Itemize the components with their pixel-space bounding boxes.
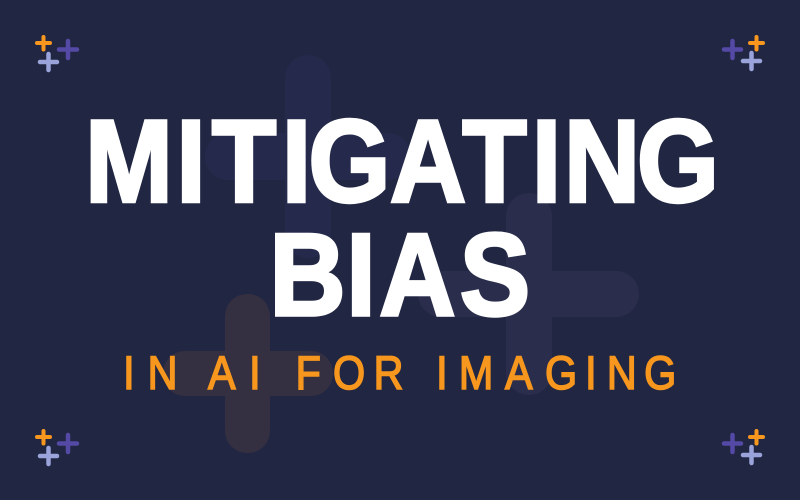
title: BIAS: BIAS	[270, 209, 530, 340]
icon: plus cluster bottom left	[37, 431, 77, 464]
title: MITIGATING: MITIGATING	[85, 95, 719, 227]
subtitle: IN AI FOR IMAGING	[123, 348, 676, 400]
icon: plus cluster top left	[37, 37, 77, 70]
large background plus: slate	[418, 193, 639, 395]
icon: plus cluster bottom right	[724, 431, 763, 463]
large background plus: warm	[163, 294, 333, 453]
large background plus: indigo	[205, 55, 411, 258]
icon: plus cluster top right	[724, 37, 763, 69]
